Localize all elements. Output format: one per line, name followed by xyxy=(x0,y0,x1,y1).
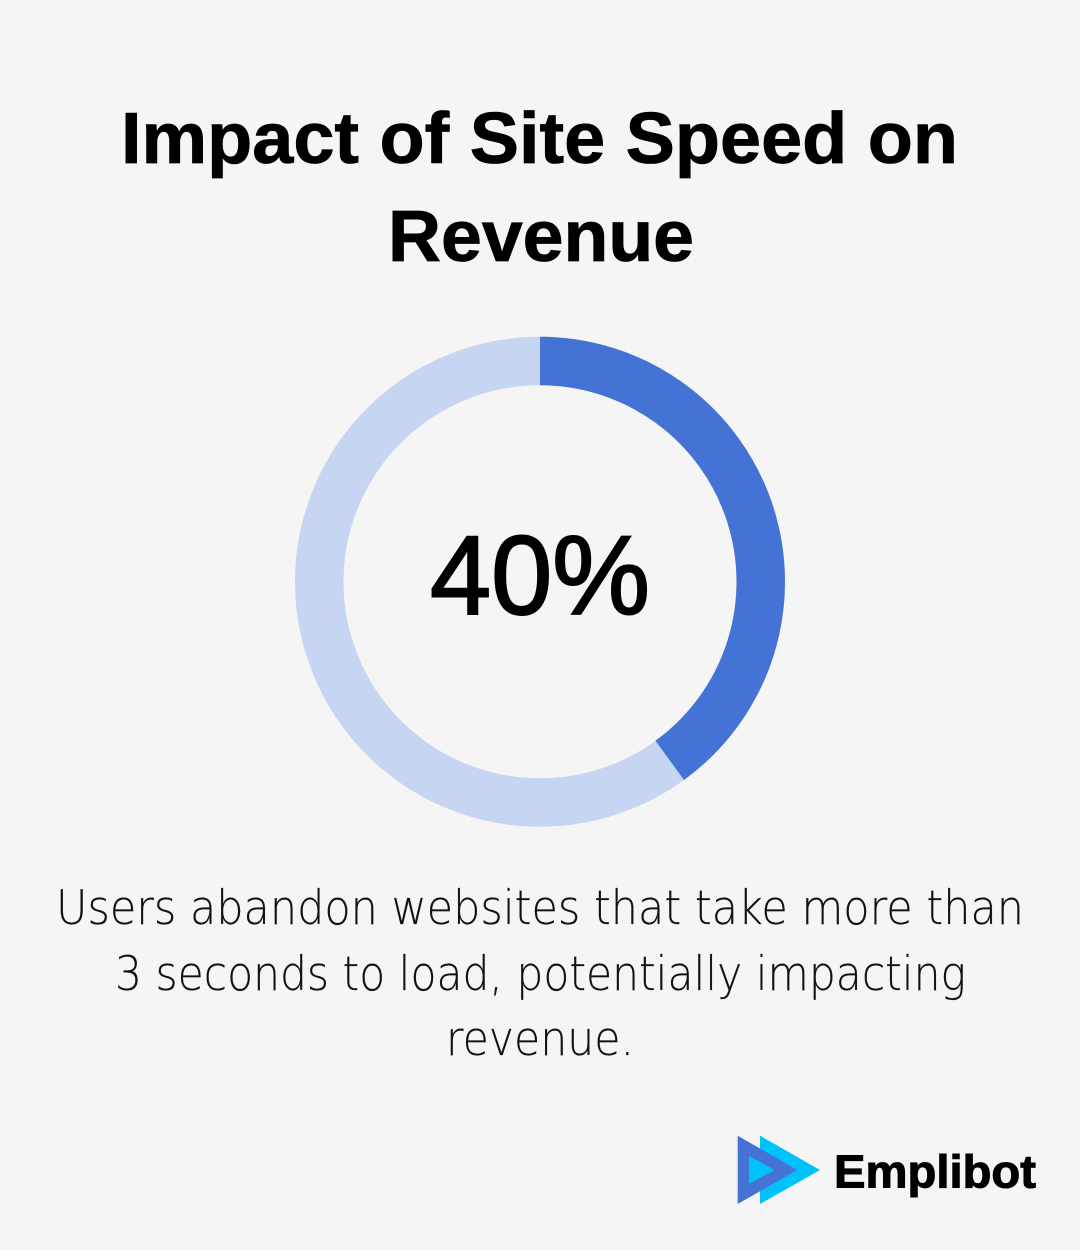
description text: revenue. xyxy=(446,1012,634,1067)
title xyxy=(121,99,958,277)
logo: Emplibot xyxy=(738,1136,1036,1204)
description text: 3 seconds to load, potentially impacting xyxy=(115,947,966,1002)
title: Impact of Site Speed on xyxy=(121,99,958,179)
donut chart: 40% xyxy=(319,361,761,802)
icon: play triangles xyxy=(738,1136,820,1204)
brand name: Emplibot xyxy=(834,1146,1036,1198)
title: Revenue xyxy=(388,197,694,277)
description text xyxy=(56,881,1024,1067)
center value: 40% xyxy=(430,513,650,638)
